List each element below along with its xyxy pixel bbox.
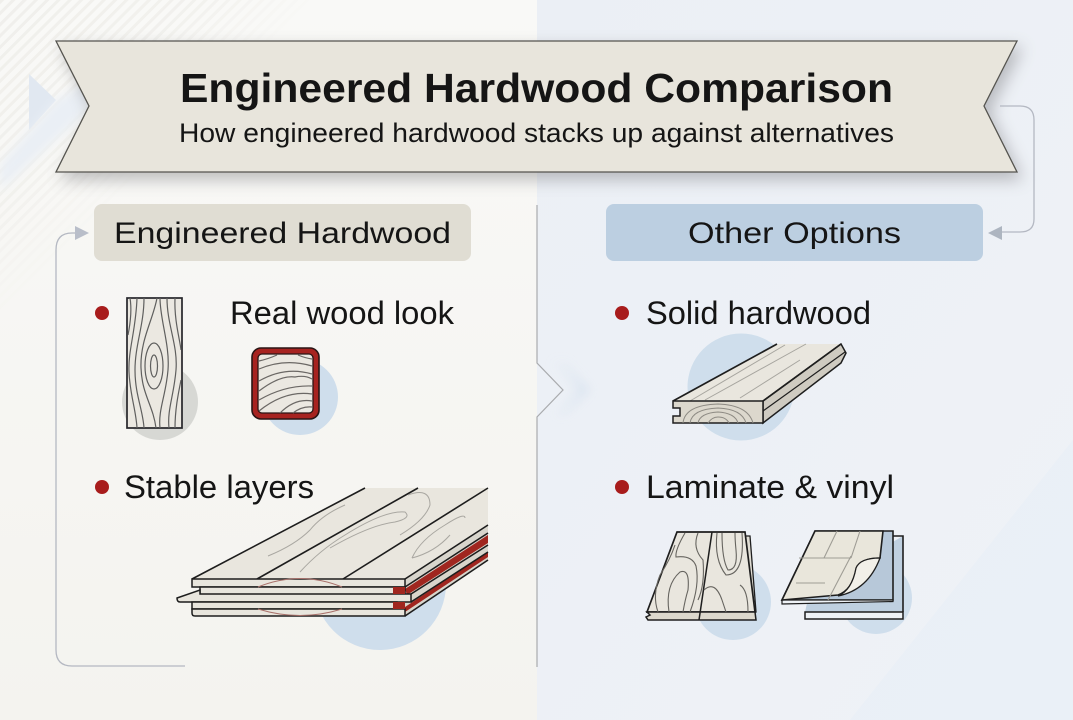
heading: Engineered Hardwood <box>94 204 471 261</box>
subtitle: How engineered hardwood stacks up against alternatives <box>179 118 894 148</box>
icon: engineered plank layers <box>177 488 488 650</box>
icon: laminate plank <box>646 532 771 640</box>
icon: wood plank face <box>122 298 198 440</box>
bullet: Stable layers: Stable layers <box>124 469 314 505</box>
icon: red framed wood sample <box>252 348 338 435</box>
banner shadow <box>60 47 1023 180</box>
title banner <box>56 41 1017 172</box>
icon: vinyl sheet with peeling corner <box>782 531 912 634</box>
title: Engineered Hardwood Comparison <box>180 65 893 111</box>
arrow: loop into Engineered Hardwood <box>56 226 185 666</box>
arrow: banner to Other Options <box>988 106 1034 240</box>
bullet: Laminate & vinyl: Laminate & vinyl <box>646 469 894 505</box>
bullet: Solid hardwood: Solid hardwood <box>646 295 871 331</box>
center divider with chevron <box>537 205 591 667</box>
heading: Engineered Hardwood: Engineered Hardwood <box>114 217 451 250</box>
heading: Other Options <box>606 204 983 261</box>
bullet: Real wood look <box>95 295 455 331</box>
heading: Other Options: Other Options <box>688 217 901 250</box>
bullet: Real wood look: Real wood look <box>230 295 455 331</box>
icon: solid hardwood plank <box>673 334 846 440</box>
